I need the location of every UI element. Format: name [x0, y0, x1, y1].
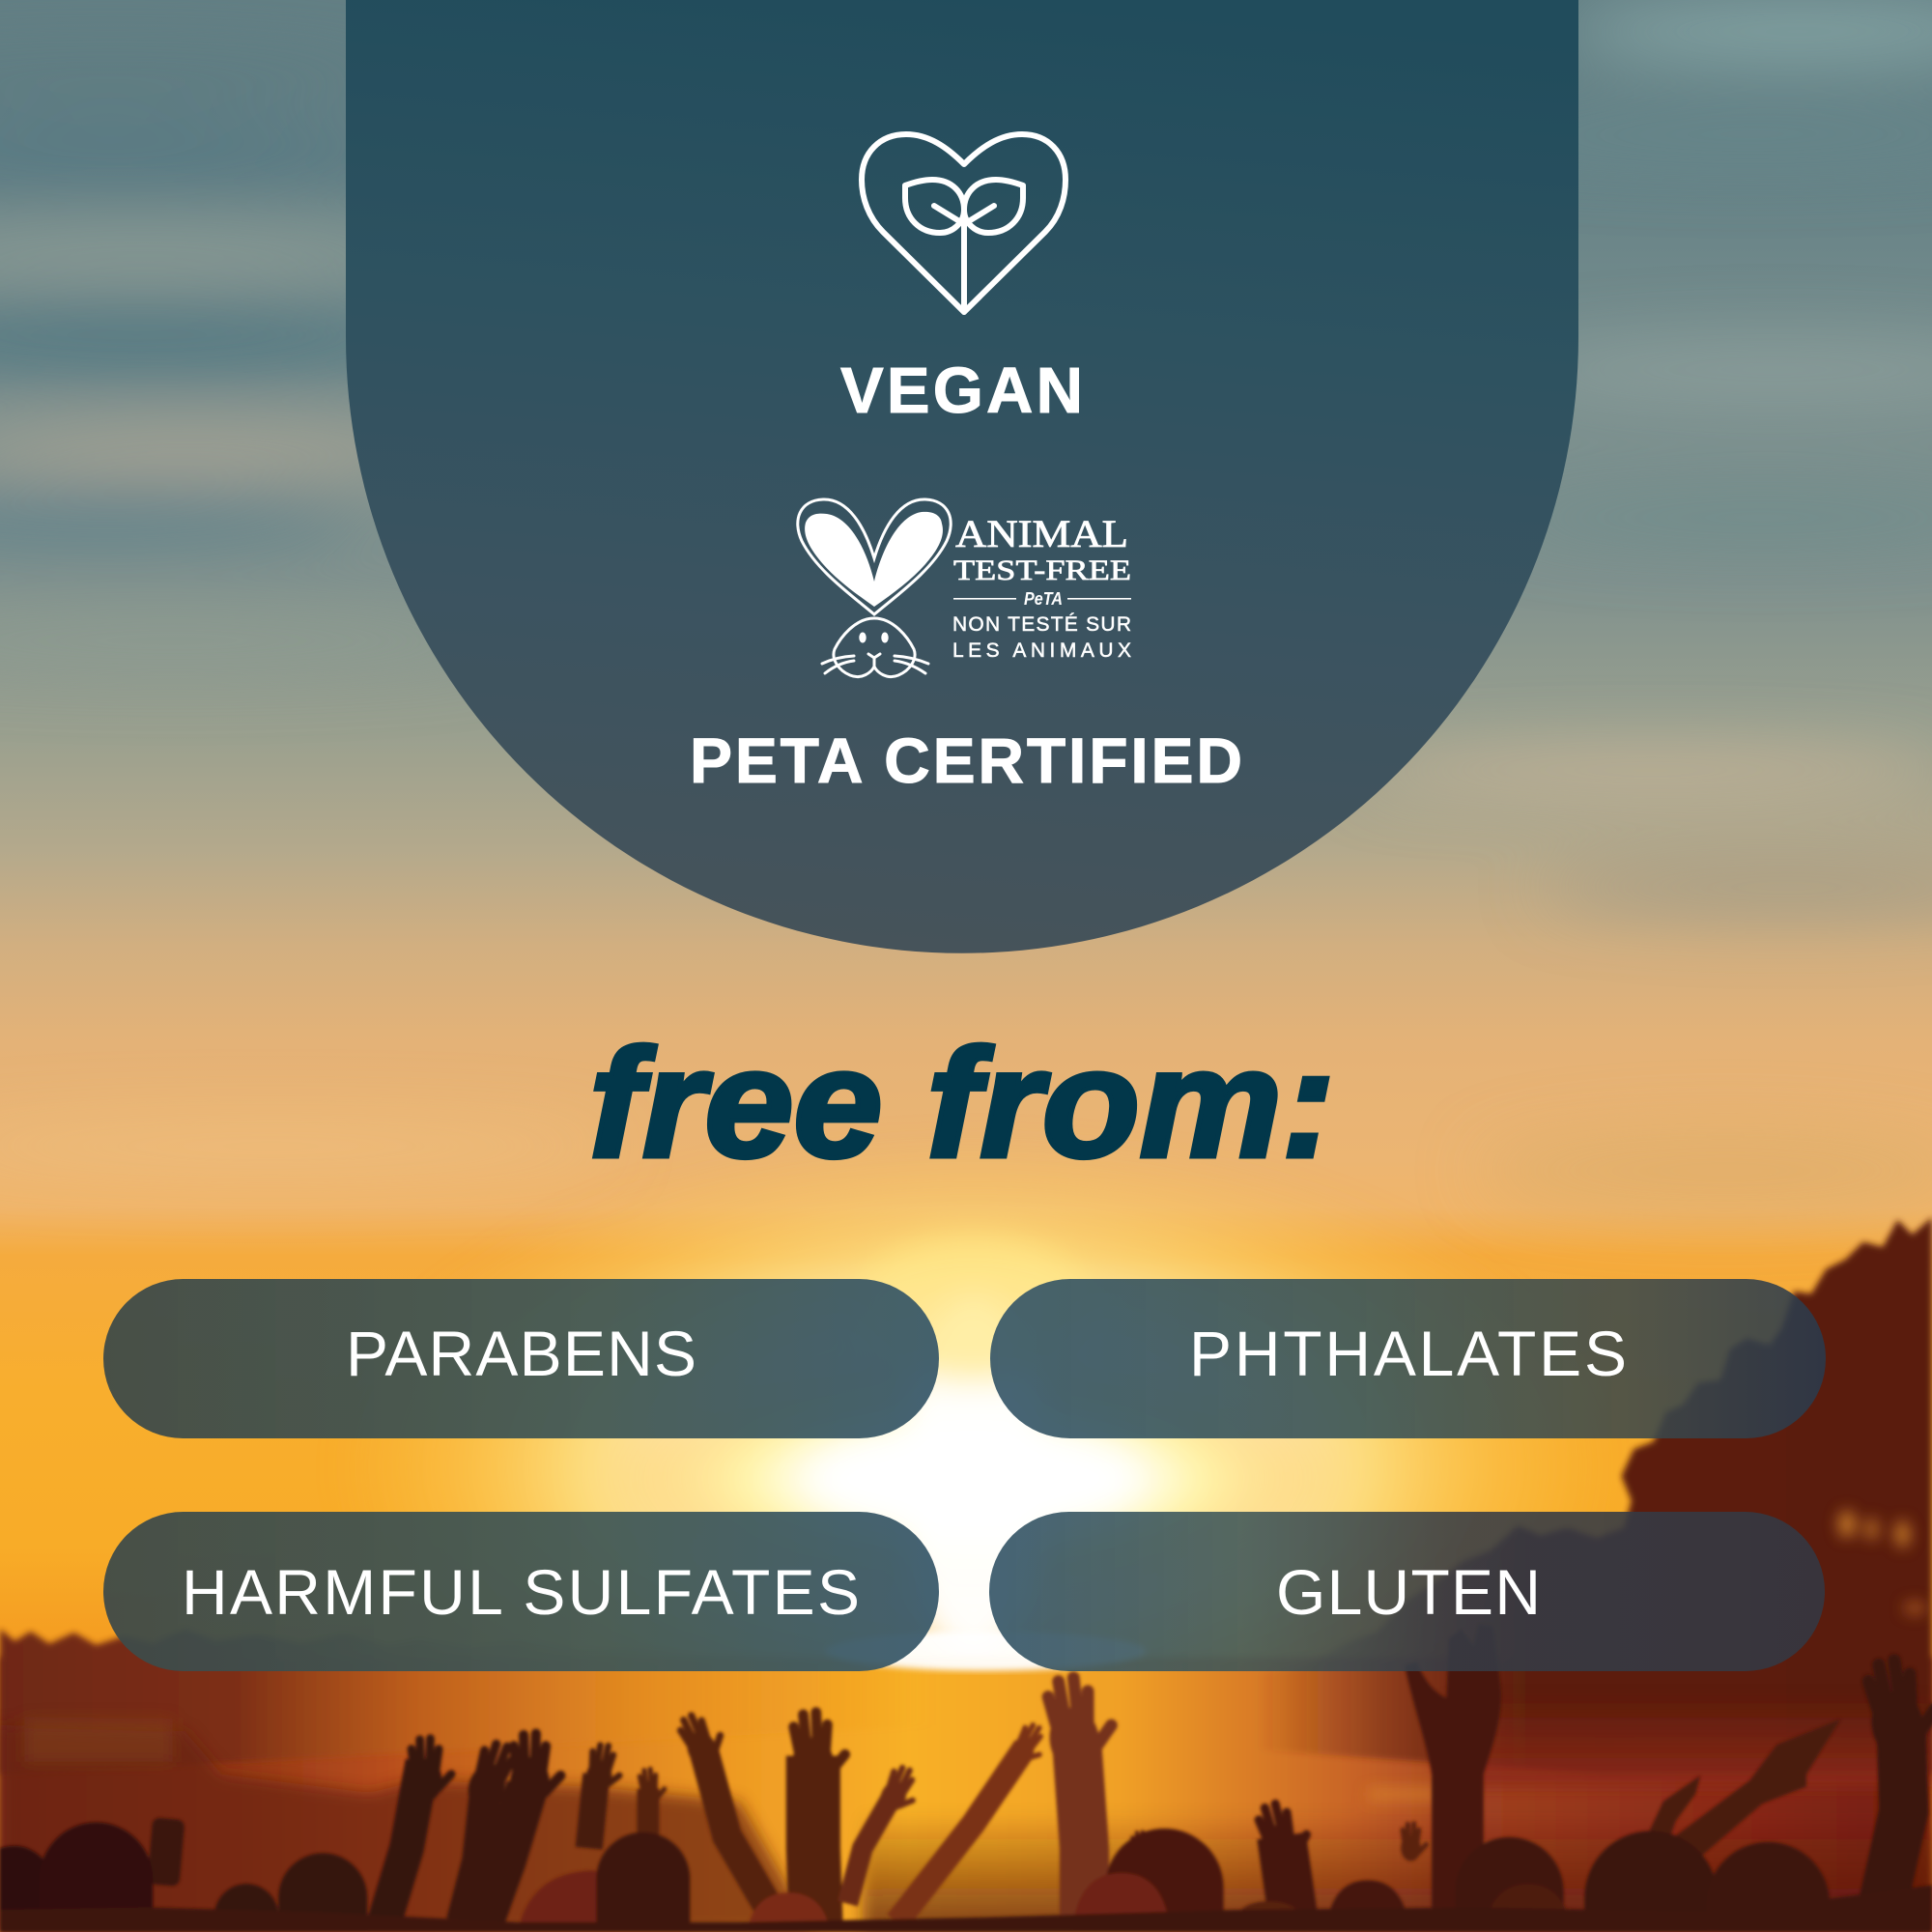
- heading: free from: free from:: [589, 1016, 1335, 1189]
- heads: [0, 1846, 60, 1932]
- panel: certifications: [346, 0, 1578, 953]
- far horizon haze: [0, 1658, 1932, 1932]
- logo: PETA animal test-free: PeTA: [1024, 589, 1063, 609]
- tree lines: [0, 1217, 1932, 1775]
- left arms: [384, 1762, 423, 1922]
- logo: PETA animal test-free: NON TESTÉ SUR: [952, 613, 1131, 636]
- text: animal test-free: ANIMAL: [955, 512, 1128, 555]
- bokeh lights in tree: [1838, 1511, 1856, 1538]
- pill: phthalates: PHTHALATES: [1189, 1318, 1627, 1389]
- raised rock hand: [1405, 1624, 1501, 1922]
- icon: rabbit ears heart: [798, 499, 951, 614]
- heading: vegan: VEGAN: [840, 355, 1083, 427]
- pointing arm: [1665, 1719, 1841, 1865]
- pill: gluten: GLUTEN: [1276, 1556, 1541, 1628]
- pill: gluten: [989, 1512, 1825, 1671]
- heading: peta certified: PETA CERTIFIED: [690, 724, 1242, 796]
- phone: [147, 1817, 185, 1887]
- pill: parabens: [103, 1279, 939, 1438]
- icon: heart with sprout: [862, 134, 1065, 312]
- pill: harmful sulfates: HARMFUL SULFATES: [182, 1556, 860, 1628]
- logo: PETA animal test-free: [798, 499, 1131, 677]
- pill: harmful sulfates: [103, 1512, 939, 1671]
- pill: phthalates: [990, 1279, 1826, 1438]
- logo: PETA animal test-free: LES ANIMAUX: [952, 639, 1131, 662]
- logo: PETA animal test-free: TEST-FREE: [953, 554, 1131, 586]
- pill: parabens: PARABENS: [346, 1318, 696, 1389]
- crowd silhouettes: [0, 1624, 1932, 1932]
- icon: rabbit face: [822, 618, 928, 677]
